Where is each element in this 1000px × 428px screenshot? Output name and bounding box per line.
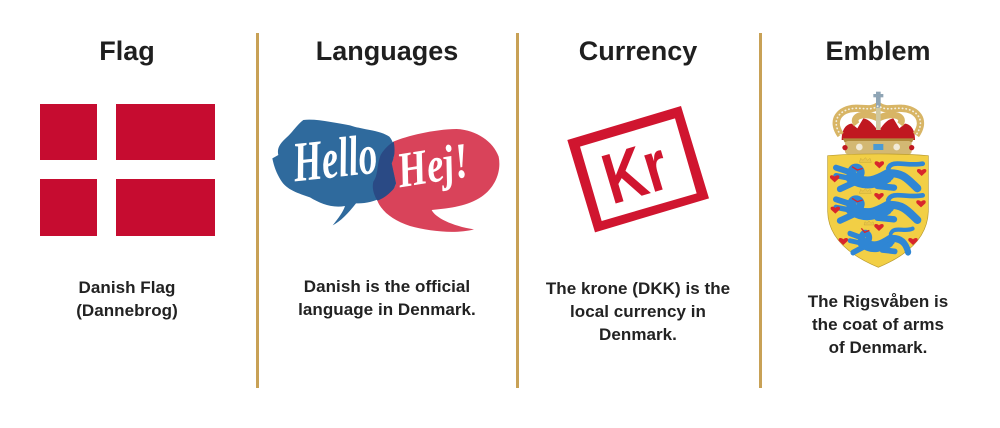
text: currency caption: local currency in <box>570 302 706 321</box>
text: emblem caption <box>808 292 948 357</box>
heading: Flag: Flag <box>99 36 155 66</box>
text: emblem caption: The Rigsvåben is <box>808 292 948 311</box>
text: emblem caption: of Denmark. <box>829 338 927 357</box>
lion crowns and tongues <box>852 158 874 232</box>
text: currency caption: Denmark. <box>599 325 677 344</box>
text: emblem caption: the coat of arms <box>812 315 944 334</box>
icon: Kr currency stamp: Kr <box>594 125 677 220</box>
text: languages caption: Danish is the official <box>304 277 470 296</box>
hearts <box>830 161 926 245</box>
lions <box>836 164 923 253</box>
text: languages caption <box>298 277 476 319</box>
text: languages caption: language in Denmark. <box>298 300 476 319</box>
icon: Danish flag <box>40 104 215 236</box>
text: flag caption: (Dannebrog) <box>76 301 178 320</box>
icon: Danish coat of arms <box>827 92 929 268</box>
heading: Currency: Currency <box>579 36 697 66</box>
text: flag caption <box>76 278 178 320</box>
text: currency caption: The krone (DKK) is the <box>546 279 730 298</box>
heading: Languages: Languages <box>316 36 458 66</box>
crown <box>836 92 920 154</box>
shield <box>828 154 928 267</box>
icon: Kr currency stamp <box>567 106 709 232</box>
icon: Hello and Hej speech bubbles: Hej! <box>392 132 473 198</box>
text: currency caption <box>546 279 730 344</box>
heading: Emblem: Emblem <box>825 36 931 66</box>
text: flag caption: Danish Flag <box>79 278 175 297</box>
icon: Hello and Hej speech bubbles <box>272 120 500 232</box>
icon: Hello and Hej speech bubbles: Hello <box>289 124 380 194</box>
